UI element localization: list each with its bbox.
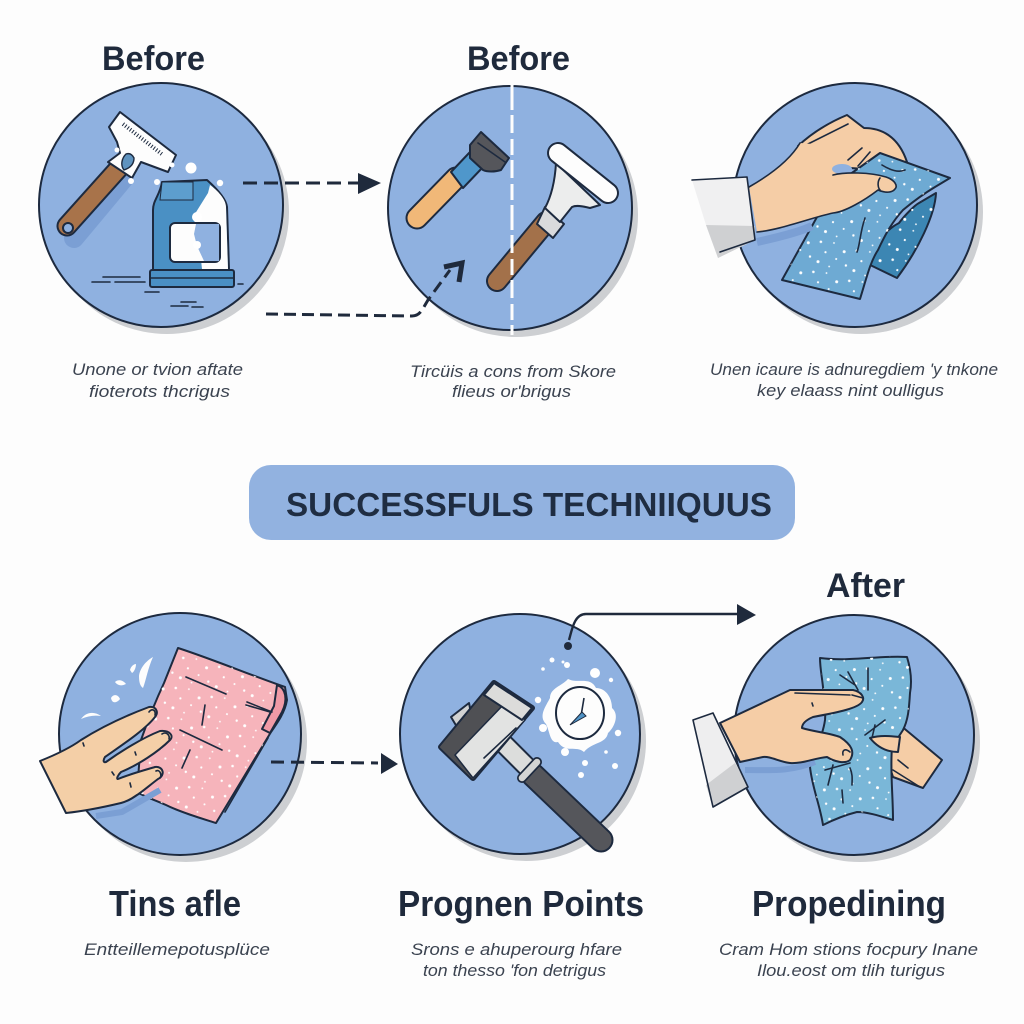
icon: water splashes	[81, 657, 153, 719]
icon: large scraper	[497, 153, 608, 281]
flow arrow: lower dashed rising	[266, 263, 462, 316]
divider: white dashed line	[510, 85, 514, 335]
caption: propedining: Cram Hom stions focpury Inane	[719, 940, 978, 959]
caption: column 2: Tircüis a cons from Skore	[410, 362, 616, 381]
caption: column 1: Unone or tvion aftate	[72, 360, 243, 379]
heading: propedining: Propedining	[752, 883, 946, 924]
panel: hand holding blue cloth	[692, 83, 983, 334]
caption: propedining: Ilou.eost om tlih turigus	[757, 961, 946, 980]
heading: tins afle: Tins afle	[109, 883, 241, 924]
icon: hand fingers behind cloth	[798, 115, 907, 180]
panel: hammer and gauge	[400, 614, 646, 861]
heading: prognen points: Prognen Points	[398, 883, 644, 924]
icon: razor	[63, 112, 176, 238]
banner: section title	[249, 465, 795, 540]
caption: column 3	[710, 360, 998, 400]
icon: small brush	[417, 132, 509, 218]
panel: hand on pink cloth	[40, 613, 307, 862]
icon: hand	[720, 690, 900, 770]
flow arrow: top dashed	[243, 173, 381, 194]
panel: hands holding blue cloth	[693, 615, 980, 862]
caption: column 2: flieus or'brigus	[452, 382, 572, 401]
caption: propedining	[719, 940, 978, 980]
caption: column 3: Unen icaure is adnuregdiem 'y tnkone	[710, 360, 998, 379]
caption: tins afle: Entteillemepotusplüce	[84, 940, 270, 959]
panel: razor and bottle	[39, 83, 289, 334]
heading: before (middle): Before	[467, 40, 570, 78]
flow arrow: solid to after	[564, 604, 756, 650]
icon: hand	[40, 707, 172, 816]
icon: blue cloth	[782, 153, 950, 299]
heading: after: After	[826, 567, 905, 605]
icon: hammer	[441, 683, 601, 840]
banner: section title: SUCCESSFULS TECHNIIQUUS	[286, 486, 772, 523]
icon: blue cloth	[810, 657, 911, 825]
caption: column 1	[72, 360, 243, 401]
icon: white splash	[535, 658, 621, 778]
caption: prognen points: ton thesso 'fon detrigus	[423, 961, 607, 980]
icon: sleeve	[693, 713, 748, 807]
caption: column 3: key elaass nint oulligus	[757, 381, 945, 400]
icon: palm and thumb	[749, 143, 896, 242]
caption: column 2	[410, 362, 616, 401]
icon: bottle	[150, 162, 234, 287]
icon: gauge dial	[556, 687, 604, 739]
icon: pink cloth	[137, 648, 287, 823]
heading: before (left): Before	[102, 40, 205, 78]
icon: sleeve	[692, 177, 755, 258]
caption: prognen points: Srons e ahuperourg hfare	[411, 940, 622, 959]
icon: second hand	[885, 725, 942, 788]
icon: floor lines	[92, 277, 243, 307]
panel: two tools split	[388, 85, 638, 337]
caption: column 1: fioterots thcrigus	[89, 382, 231, 401]
caption: prognen points	[411, 940, 622, 980]
flow arrow: bottom dashed	[271, 753, 398, 774]
